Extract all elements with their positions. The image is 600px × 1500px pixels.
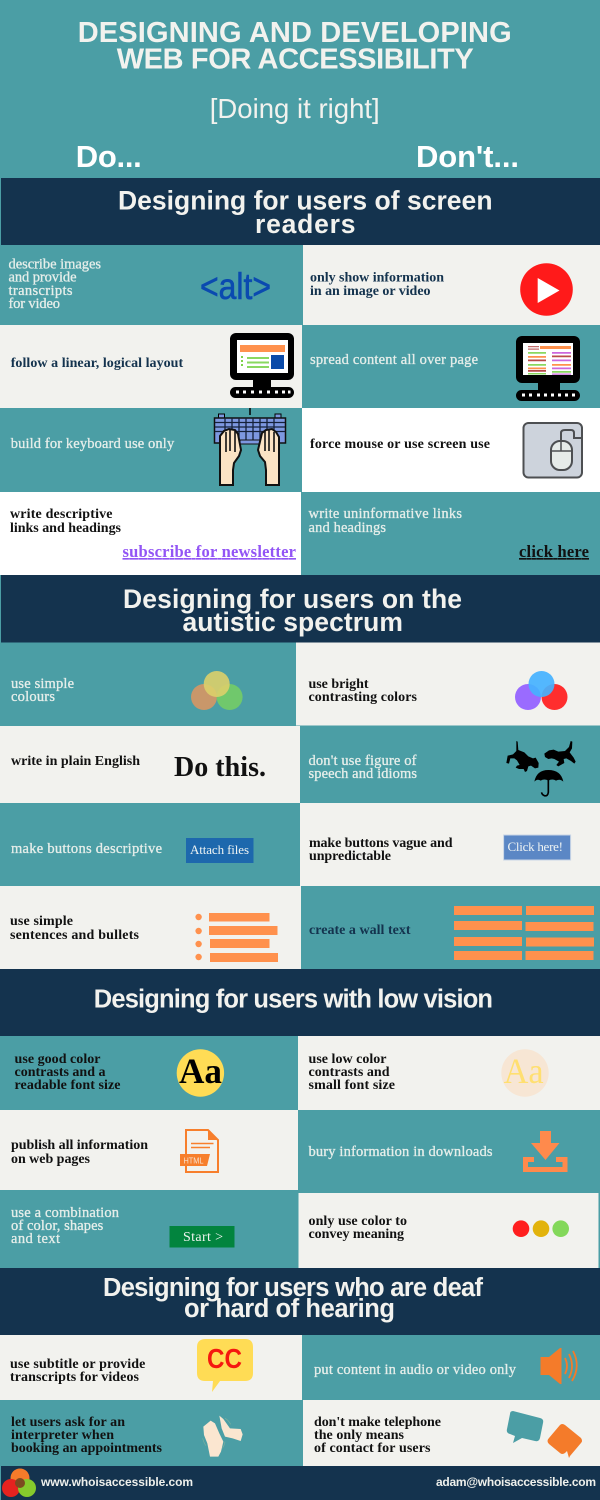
text: vague buttons: unpredictable xyxy=(309,849,391,864)
button: attach files xyxy=(186,838,254,863)
text: bright colors xyxy=(308,677,418,705)
text: describe images: and provide xyxy=(8,270,76,286)
icon: tidy monitor xyxy=(230,333,294,398)
panel: good contrast xyxy=(0,1036,298,1110)
subtitle: [Doing it right] xyxy=(210,93,380,124)
icon: wall of text blocks xyxy=(454,906,594,960)
text: colour shapes and text xyxy=(11,1205,120,1247)
button: start xyxy=(170,1226,234,1248)
section heading: autistic spectrum: Designing for users on the xyxy=(123,584,462,614)
text: no idioms: speech and idioms xyxy=(308,766,417,782)
link: subscribe for newsletter: subscribe for newsletter xyxy=(122,542,296,561)
panel: vague buttons xyxy=(300,803,600,886)
text: telephone only: the only means xyxy=(314,1428,405,1443)
column heading: don't: Don't... xyxy=(416,139,519,174)
text: simple sentences: use simple xyxy=(10,914,73,929)
panel: descriptive links xyxy=(0,492,301,575)
text: low contrast: contrasts and xyxy=(308,1065,390,1080)
button: attach files: Attach files xyxy=(190,842,249,857)
text: uninformative links: write uninformative links xyxy=(308,506,462,522)
text: publish on web pages: publish all information xyxy=(11,1138,148,1153)
text: good contrast: contrasts and a xyxy=(14,1065,106,1080)
text: uninformative links xyxy=(308,506,462,536)
text: simple colours: colours xyxy=(11,689,55,705)
text: interpreter: interpreter when xyxy=(11,1428,114,1443)
icon: traffic light dots xyxy=(513,1220,569,1237)
text: colour shapes and text: and text xyxy=(11,1231,60,1247)
text: descriptive links xyxy=(10,507,122,536)
section heading: autistic spectrum: autistic spectrum xyxy=(182,607,403,637)
panel: no idioms xyxy=(300,726,600,803)
text: descriptive links: links and headings xyxy=(10,521,122,536)
icon: download arrow xyxy=(523,1131,568,1172)
text: telephone only: don't make telephone xyxy=(314,1415,441,1430)
footer xyxy=(1,1466,600,1500)
text: wall of text: create a wall text xyxy=(309,923,411,938)
text: vague buttons: make buttons vague and xyxy=(309,836,453,851)
text: good contrast xyxy=(14,1052,120,1093)
icon: speaker xyxy=(540,1348,577,1384)
logo: overlapping circles xyxy=(2,1468,36,1497)
panel: simple colours xyxy=(0,642,295,726)
icon: alt tag: <alt> xyxy=(200,266,271,307)
icon: bright colour circles xyxy=(515,671,568,710)
text: interpreter xyxy=(11,1415,163,1456)
text: descriptive buttons: make buttons descriptive xyxy=(11,841,162,857)
text: linear layout: follow a linear, logical layout xyxy=(11,356,184,371)
text: colour only: convey meaning xyxy=(308,1227,404,1242)
button: click here xyxy=(504,835,571,860)
text: only show information: in an image or video xyxy=(310,284,430,299)
section heading: deaf or hard of hearing: or hard of hearing xyxy=(184,1295,395,1323)
text: describe images: describe images xyxy=(8,256,101,272)
text: audio or video only: put content in audio or video only xyxy=(314,1362,517,1378)
icon: mouse on pad xyxy=(524,423,583,478)
text: simple sentences: sentences and bullets xyxy=(10,928,140,943)
panel: audio or video only xyxy=(302,1335,600,1400)
title: DESIGNING AND DEVELOPING xyxy=(78,17,512,49)
section heading: low vision xyxy=(0,969,600,1036)
text: spread content: spread content all over page xyxy=(310,352,478,368)
panel: plain English xyxy=(0,726,300,803)
icon: closed captions bubble xyxy=(197,1339,253,1392)
panel: descriptive buttons xyxy=(0,803,299,886)
text: bury in downloads: bury information in downloads xyxy=(308,1144,493,1160)
icon: speech bubbles xyxy=(507,1411,582,1458)
icon: closed captions bubble: CC xyxy=(207,1343,242,1374)
section heading: screen readers: readers xyxy=(255,209,356,239)
email: adam@whoisaccessible.com xyxy=(436,1475,596,1489)
text: telephone only xyxy=(314,1415,441,1456)
text: only show information: only show information xyxy=(310,270,444,286)
panel: uninformative links xyxy=(301,492,600,575)
icon: video play button xyxy=(520,263,573,316)
button: start: Start > xyxy=(183,1230,223,1245)
icon: raining cats and dogs xyxy=(506,741,576,796)
column heading: do: Do... xyxy=(76,139,142,174)
text: describe images: for video xyxy=(8,296,60,312)
panel: bury in downloads xyxy=(298,1110,600,1193)
panel: telephone only xyxy=(303,1400,600,1466)
text: keyboard use: build for keyboard use only xyxy=(11,436,175,452)
panel: colour shapes and text xyxy=(0,1190,298,1268)
button: click here: Click here! xyxy=(508,839,563,854)
panel: keyboard use xyxy=(0,408,301,492)
icon: cluttered monitor xyxy=(516,336,580,401)
section heading: autistic spectrum xyxy=(1,575,600,642)
text: describe images xyxy=(8,256,101,312)
text: simple colours: use simple xyxy=(11,676,74,692)
text: colour shapes and text: of color, shapes xyxy=(11,1218,104,1234)
text: mouse or screen use: force mouse or use screen use xyxy=(310,437,490,452)
section heading: screen readers: Designing for users of screen xyxy=(118,186,492,216)
text: bright colors: use bright xyxy=(308,677,369,692)
text: publish on web pages: on web pages xyxy=(11,1152,91,1167)
panel: spread content xyxy=(302,325,600,408)
text: colour shapes and text: use a combination xyxy=(11,1205,120,1221)
text: low contrast: use low color xyxy=(308,1052,386,1067)
example: do this: Do this. xyxy=(174,752,266,783)
panel: publish on web pages xyxy=(0,1110,298,1190)
text: colour only: only use color to xyxy=(308,1214,407,1229)
text: telephone only: of contact for users xyxy=(314,1441,431,1456)
panel: bright colors xyxy=(296,642,600,726)
text: descriptive links: write descriptive xyxy=(10,507,112,522)
text: bright colors: contrasting colors xyxy=(308,690,418,705)
text: no idioms: don't use figure of xyxy=(308,753,417,769)
panel: interpreter xyxy=(0,1400,303,1466)
icon: muted colour circles xyxy=(191,671,243,710)
text: good contrast: readable font size xyxy=(14,1078,120,1093)
text: good contrast: use good color xyxy=(14,1052,100,1067)
text: simple colours xyxy=(11,676,74,705)
title xyxy=(78,17,512,76)
text: simple sentences xyxy=(10,914,140,943)
link: click here: click here xyxy=(519,542,589,561)
panel: low contrast xyxy=(298,1036,600,1110)
icon: high contrast Aa: Aa xyxy=(179,1051,222,1091)
panel: wall of text xyxy=(301,886,600,969)
panel: colour only xyxy=(298,1193,598,1268)
icon: signing hands xyxy=(203,1416,243,1457)
text: colour only xyxy=(308,1214,407,1242)
icon: HTML document xyxy=(180,1130,218,1172)
title: WEB FOR ACCESSIBILITY xyxy=(117,44,474,76)
section heading: deaf or hard of hearing: Designing for users who are deaf xyxy=(103,1274,484,1302)
panel: simple sentences xyxy=(0,886,301,969)
text: interpreter: booking an appointments xyxy=(11,1441,163,1456)
text: uninformative links: and headings xyxy=(308,520,386,536)
icon: low contrast Aa: Aa xyxy=(504,1051,544,1091)
text: vague buttons xyxy=(309,836,453,864)
text: plain English: write in plain English xyxy=(11,754,140,769)
text: low contrast xyxy=(308,1052,395,1093)
icon: HTML document: HTML xyxy=(184,1156,204,1166)
text: subtitles: transcripts for videos xyxy=(10,1370,140,1385)
text: subtitles xyxy=(10,1357,145,1385)
text: no idioms xyxy=(308,753,417,782)
section heading: screen readers xyxy=(1,178,600,245)
panel: mouse or screen use xyxy=(302,408,600,492)
section heading: low vision: Designing for users with low vision xyxy=(94,986,493,1014)
panel: linear layout xyxy=(0,325,302,408)
text: describe images: transcripts xyxy=(8,283,73,299)
panel: only show information xyxy=(303,245,600,325)
icon: hands on keyboard xyxy=(214,408,286,485)
section heading: deaf or hard of hearing xyxy=(0,1268,600,1335)
panel: subtitles xyxy=(0,1335,302,1400)
panel: describe images xyxy=(0,245,302,325)
text: low contrast: small font size xyxy=(308,1078,395,1093)
text: publish on web pages xyxy=(11,1138,148,1167)
text: subtitles: use subtitle or provide xyxy=(10,1357,145,1372)
text: only show information xyxy=(310,270,444,299)
text: interpreter: let users ask for an xyxy=(11,1415,125,1430)
icon: bulleted list xyxy=(195,913,278,962)
website: www.whoisaccessible.com xyxy=(40,1475,193,1489)
